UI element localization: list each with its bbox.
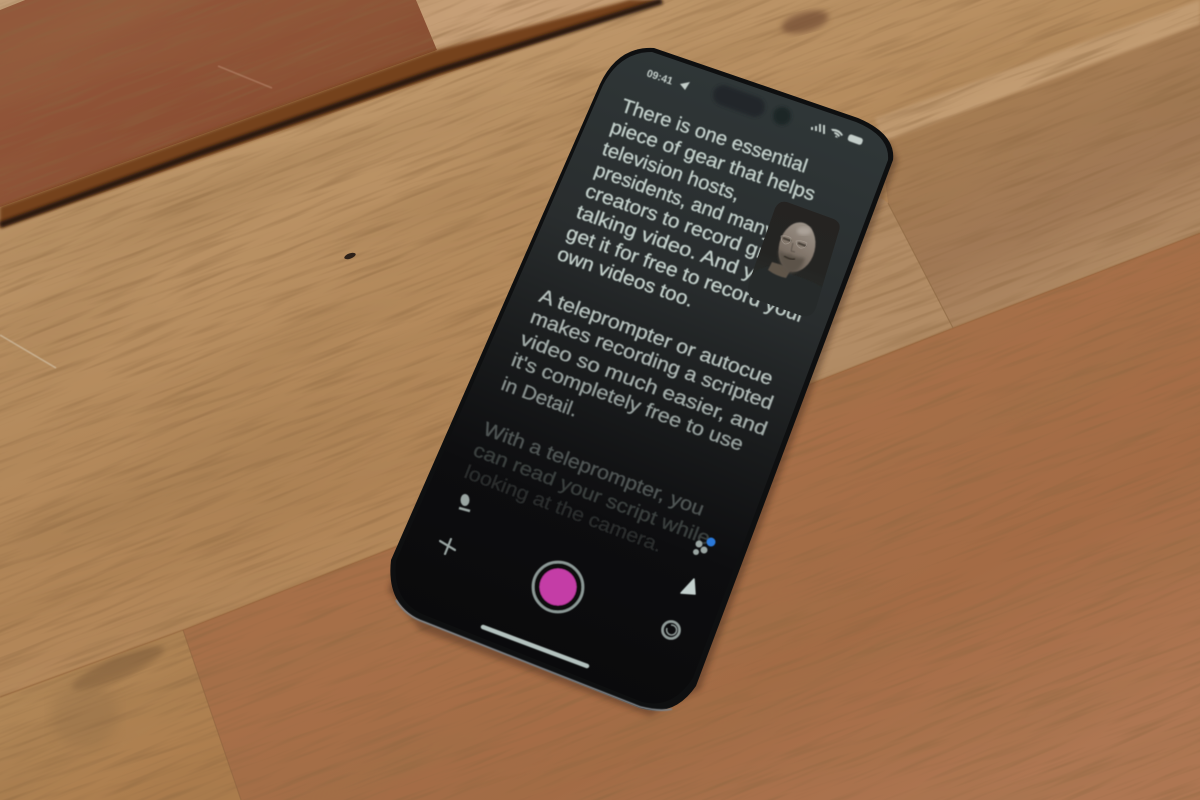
home indicator (483, 627, 587, 666)
paragraph 1: television hosts, (599, 138, 743, 206)
control: microphone (459, 494, 470, 511)
record button (533, 562, 583, 612)
plank: light stripe right (875, 0, 1200, 142)
control: timer (662, 622, 680, 638)
plank: right darker (880, 22, 1200, 328)
paragraph 2: A teleprompter or autocue (536, 285, 776, 390)
knots and marks (779, 6, 831, 38)
camera preview: presenter (745, 202, 840, 322)
eye shadows (783, 238, 806, 246)
beard (779, 250, 805, 273)
paragraph 1: presidents, and many (591, 159, 778, 243)
paragraph 1: piece of gear that helps (607, 116, 818, 206)
dynamic island (710, 82, 791, 125)
paragraph 1: talking video. And you (573, 201, 781, 292)
head (778, 222, 816, 272)
paragraph 2: video so much easier, and (517, 328, 770, 440)
paragraph 3 fading: looking at the camera. (461, 461, 665, 557)
teleprompter text (461, 95, 818, 557)
paragraph 1: There is one essential (618, 95, 810, 178)
gap between planks (0, 0, 662, 228)
plank: triangle beside phone (800, 190, 953, 380)
paragraph 2: it's completely free to use (508, 349, 746, 456)
plank seams (0, 203, 1200, 800)
plank: bottom left (0, 630, 241, 800)
paragraph 1 (554, 95, 818, 328)
neck (768, 262, 792, 278)
plank: lower red (0, 233, 1200, 800)
paragraph 1: creators to record great (582, 180, 796, 274)
gap shadow (0, 1, 662, 225)
nose (791, 243, 795, 252)
signal bars (811, 124, 825, 134)
paragraph 3 fading: With a teleprompter, you (480, 418, 707, 521)
phone shadow (388, 140, 898, 716)
clock: 09:41 (645, 67, 674, 88)
paragraph 2: in Detail. (498, 373, 581, 422)
forehead highlight (797, 227, 811, 235)
mouth (784, 256, 795, 259)
paragraph 2: makes recording a scripted (527, 306, 776, 415)
paragraph 3 fading (461, 418, 713, 557)
wifi (831, 129, 843, 138)
shoulders (748, 292, 802, 316)
bottom metal edge (396, 600, 672, 710)
control: play triangle (681, 579, 695, 594)
glasses (781, 236, 807, 248)
paragraph 3 fading: can read your script while (470, 439, 713, 550)
plank: upper left red (0, 0, 437, 207)
location arrow (680, 82, 690, 90)
phone body (390, 48, 893, 710)
paragraph 2 (498, 285, 776, 456)
control: close X (440, 539, 455, 554)
status bar (645, 67, 864, 145)
screen (396, 52, 888, 704)
paragraph 1: get it for free to record your (563, 222, 808, 328)
phone (390, 48, 893, 710)
control: settings with blue badge (693, 538, 716, 555)
corner of light plank (0, 0, 25, 10)
paragraph 1: own videos too. (554, 243, 696, 312)
preview frame (748, 202, 840, 316)
battery (847, 134, 864, 145)
plank: top strip (415, 0, 660, 55)
